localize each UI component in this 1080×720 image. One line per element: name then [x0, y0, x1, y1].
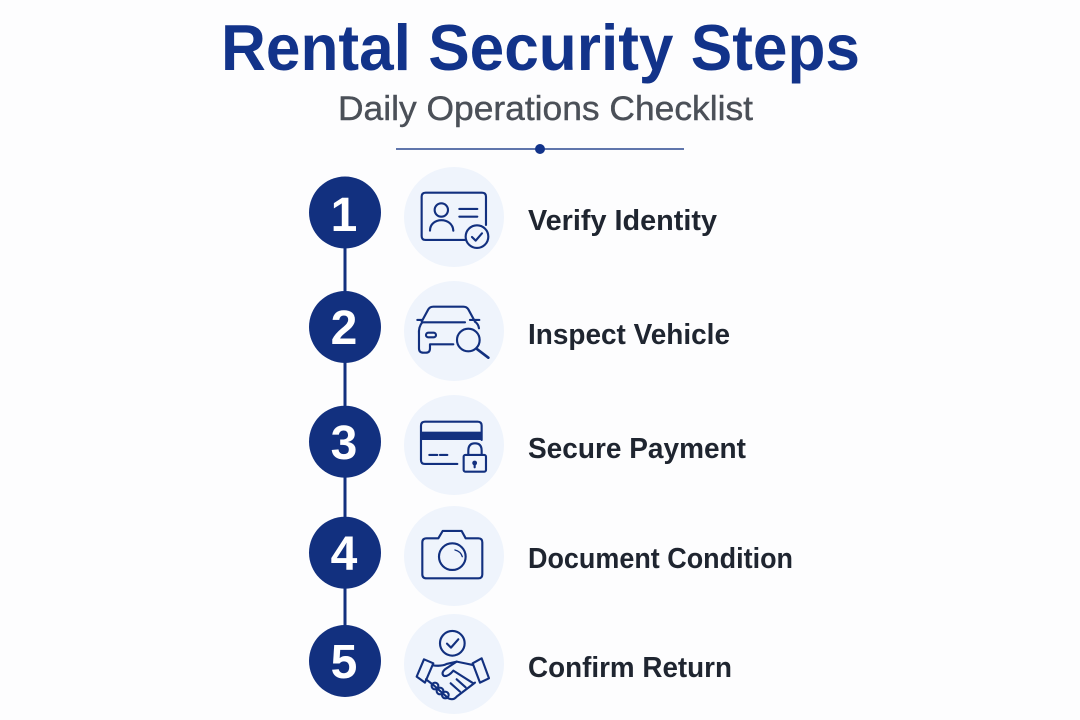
icon: car with magnifier	[404, 281, 504, 381]
label: Inspect Vehicle	[528, 319, 730, 351]
number badge 2: 2	[331, 302, 357, 355]
number badge 3: 3	[331, 417, 357, 470]
number badge 4	[309, 517, 381, 589]
number badge 5: 5	[331, 636, 357, 689]
label: Verify Identity	[528, 205, 717, 237]
label: Confirm Return	[528, 652, 732, 684]
icon: credit card with lock	[404, 395, 504, 495]
icon: camera	[404, 506, 504, 606]
number badge 2	[309, 291, 381, 363]
step 5	[309, 614, 732, 714]
icon: handshake with check	[404, 614, 504, 714]
label: Document Condition	[528, 543, 793, 575]
step 1	[309, 167, 717, 267]
number badge 1: 1	[331, 189, 357, 242]
timeline connector	[344, 212, 346, 661]
number badge 5	[309, 625, 381, 697]
number badge 1	[309, 176, 381, 248]
label: Secure Payment	[528, 433, 746, 465]
divider with dot	[396, 144, 684, 154]
step 2	[309, 281, 730, 381]
number badge 3	[309, 406, 381, 478]
number badge 4: 4	[331, 528, 358, 581]
title: Rental Security Steps	[221, 11, 860, 84]
subtitle: Daily Operations Checklist	[338, 90, 754, 128]
step 4	[309, 506, 793, 606]
step 3	[309, 395, 746, 495]
icon: ID card with check	[404, 167, 504, 267]
